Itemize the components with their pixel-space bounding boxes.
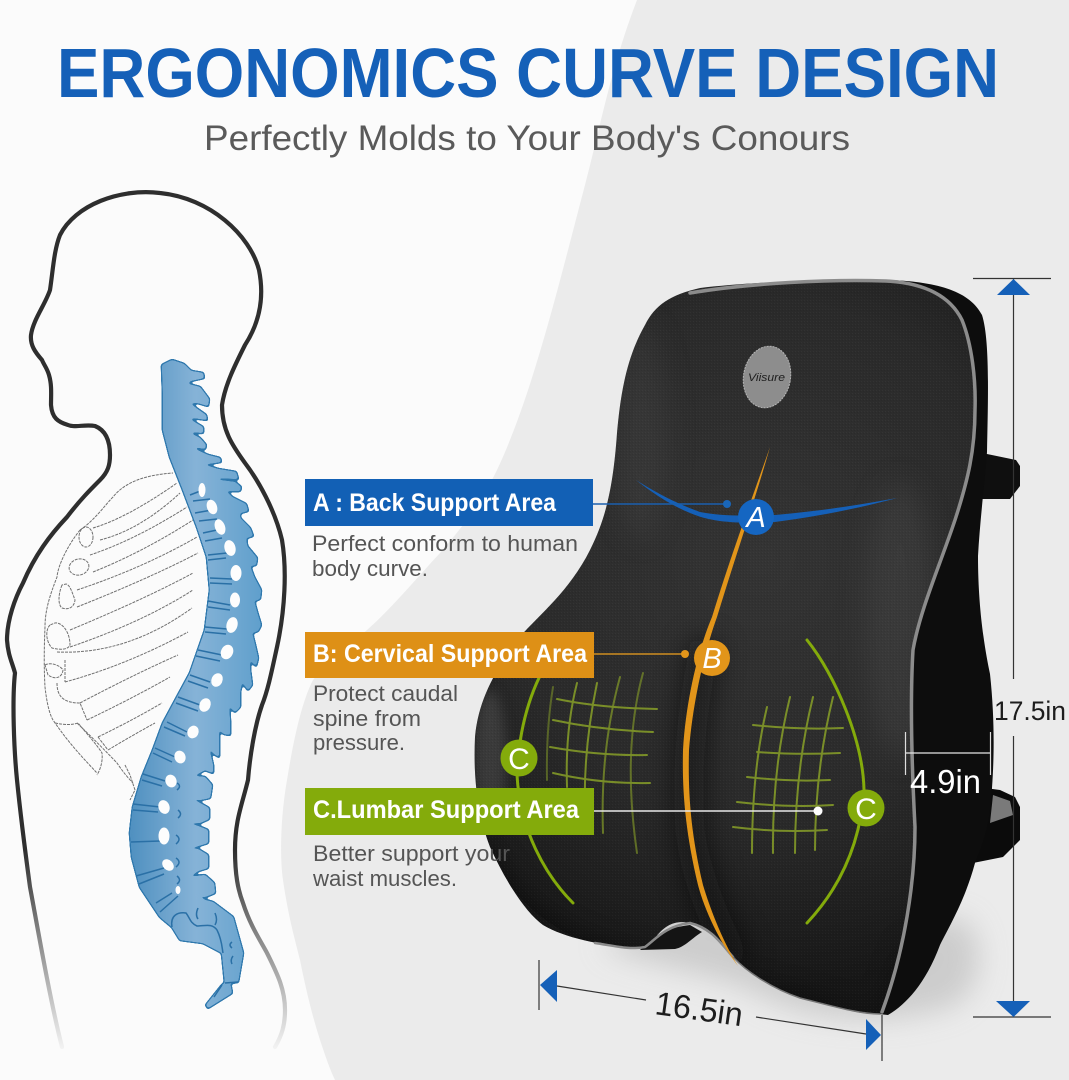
cushion back panel (860, 280, 994, 1015)
arrow left (540, 970, 557, 1002)
description C: Better support your (313, 841, 511, 866)
title: ERGONOMICS CURVE DESIGN (57, 34, 999, 112)
logo badge (738, 342, 796, 412)
description C (312, 841, 511, 891)
cushion floor shadow (600, 900, 979, 1019)
label C: C.Lumbar Support Area (313, 796, 580, 824)
left grid lines (547, 673, 657, 853)
right green curve (807, 640, 864, 923)
width dimension (539, 960, 882, 1061)
description B (313, 681, 458, 755)
description C: waist muscles. (312, 866, 457, 891)
label C (305, 788, 594, 835)
logo badge: Viisure (748, 372, 785, 384)
description B: spine from (313, 706, 421, 731)
depth label: 4.9in (910, 763, 981, 800)
spine edge (130, 360, 261, 1008)
cushion (470, 270, 1020, 1030)
connector C (594, 806, 822, 816)
label B: B: Cervical Support Area (313, 640, 588, 668)
label A (305, 479, 593, 526)
cushion notch (640, 925, 702, 950)
marker C left: C (508, 743, 530, 776)
callout B (305, 632, 730, 755)
label A: A : Back Support Area (313, 489, 557, 517)
description A: body curve. (312, 556, 428, 581)
cushion shading (474, 321, 943, 962)
width label: 16.5in (653, 984, 745, 1033)
label B (305, 632, 594, 678)
lower strap (940, 788, 1020, 868)
spine (130, 360, 261, 1008)
arrow right (866, 1019, 881, 1050)
marker A: A (744, 502, 766, 534)
height label: 17.5in (994, 696, 1066, 726)
spine discs (131, 490, 238, 997)
cushion piping (595, 280, 975, 1014)
rib cage (44, 473, 198, 800)
marker C right: C (855, 793, 877, 826)
right grid lines (733, 697, 843, 853)
connector A (593, 500, 731, 508)
spine foramina (156, 483, 242, 894)
marker C left (500, 740, 538, 776)
cushion front panel (470, 270, 980, 1030)
arrow down (996, 1001, 1030, 1017)
marker B (694, 640, 730, 676)
connector B (594, 650, 689, 658)
height dimension (973, 278, 1066, 1017)
marker B: B (702, 643, 722, 675)
description B: pressure. (313, 730, 405, 755)
blue arc (636, 480, 897, 523)
description B: Protect caudal (313, 681, 458, 706)
marker C right (848, 790, 884, 826)
subtitle: Perfectly Molds to Your Body's Conours (204, 119, 850, 158)
arrow up (997, 279, 1030, 295)
callout A (305, 479, 774, 581)
spine fill (130, 360, 261, 1008)
orange center curve (683, 447, 770, 966)
depth dimension (906, 732, 990, 800)
description A (312, 531, 578, 581)
left green curve (517, 655, 573, 903)
upper strap (975, 452, 1020, 499)
callout C (305, 740, 884, 891)
description A: Perfect conform to human (312, 531, 578, 556)
marker A (738, 499, 774, 535)
human body outline (7, 192, 285, 1047)
